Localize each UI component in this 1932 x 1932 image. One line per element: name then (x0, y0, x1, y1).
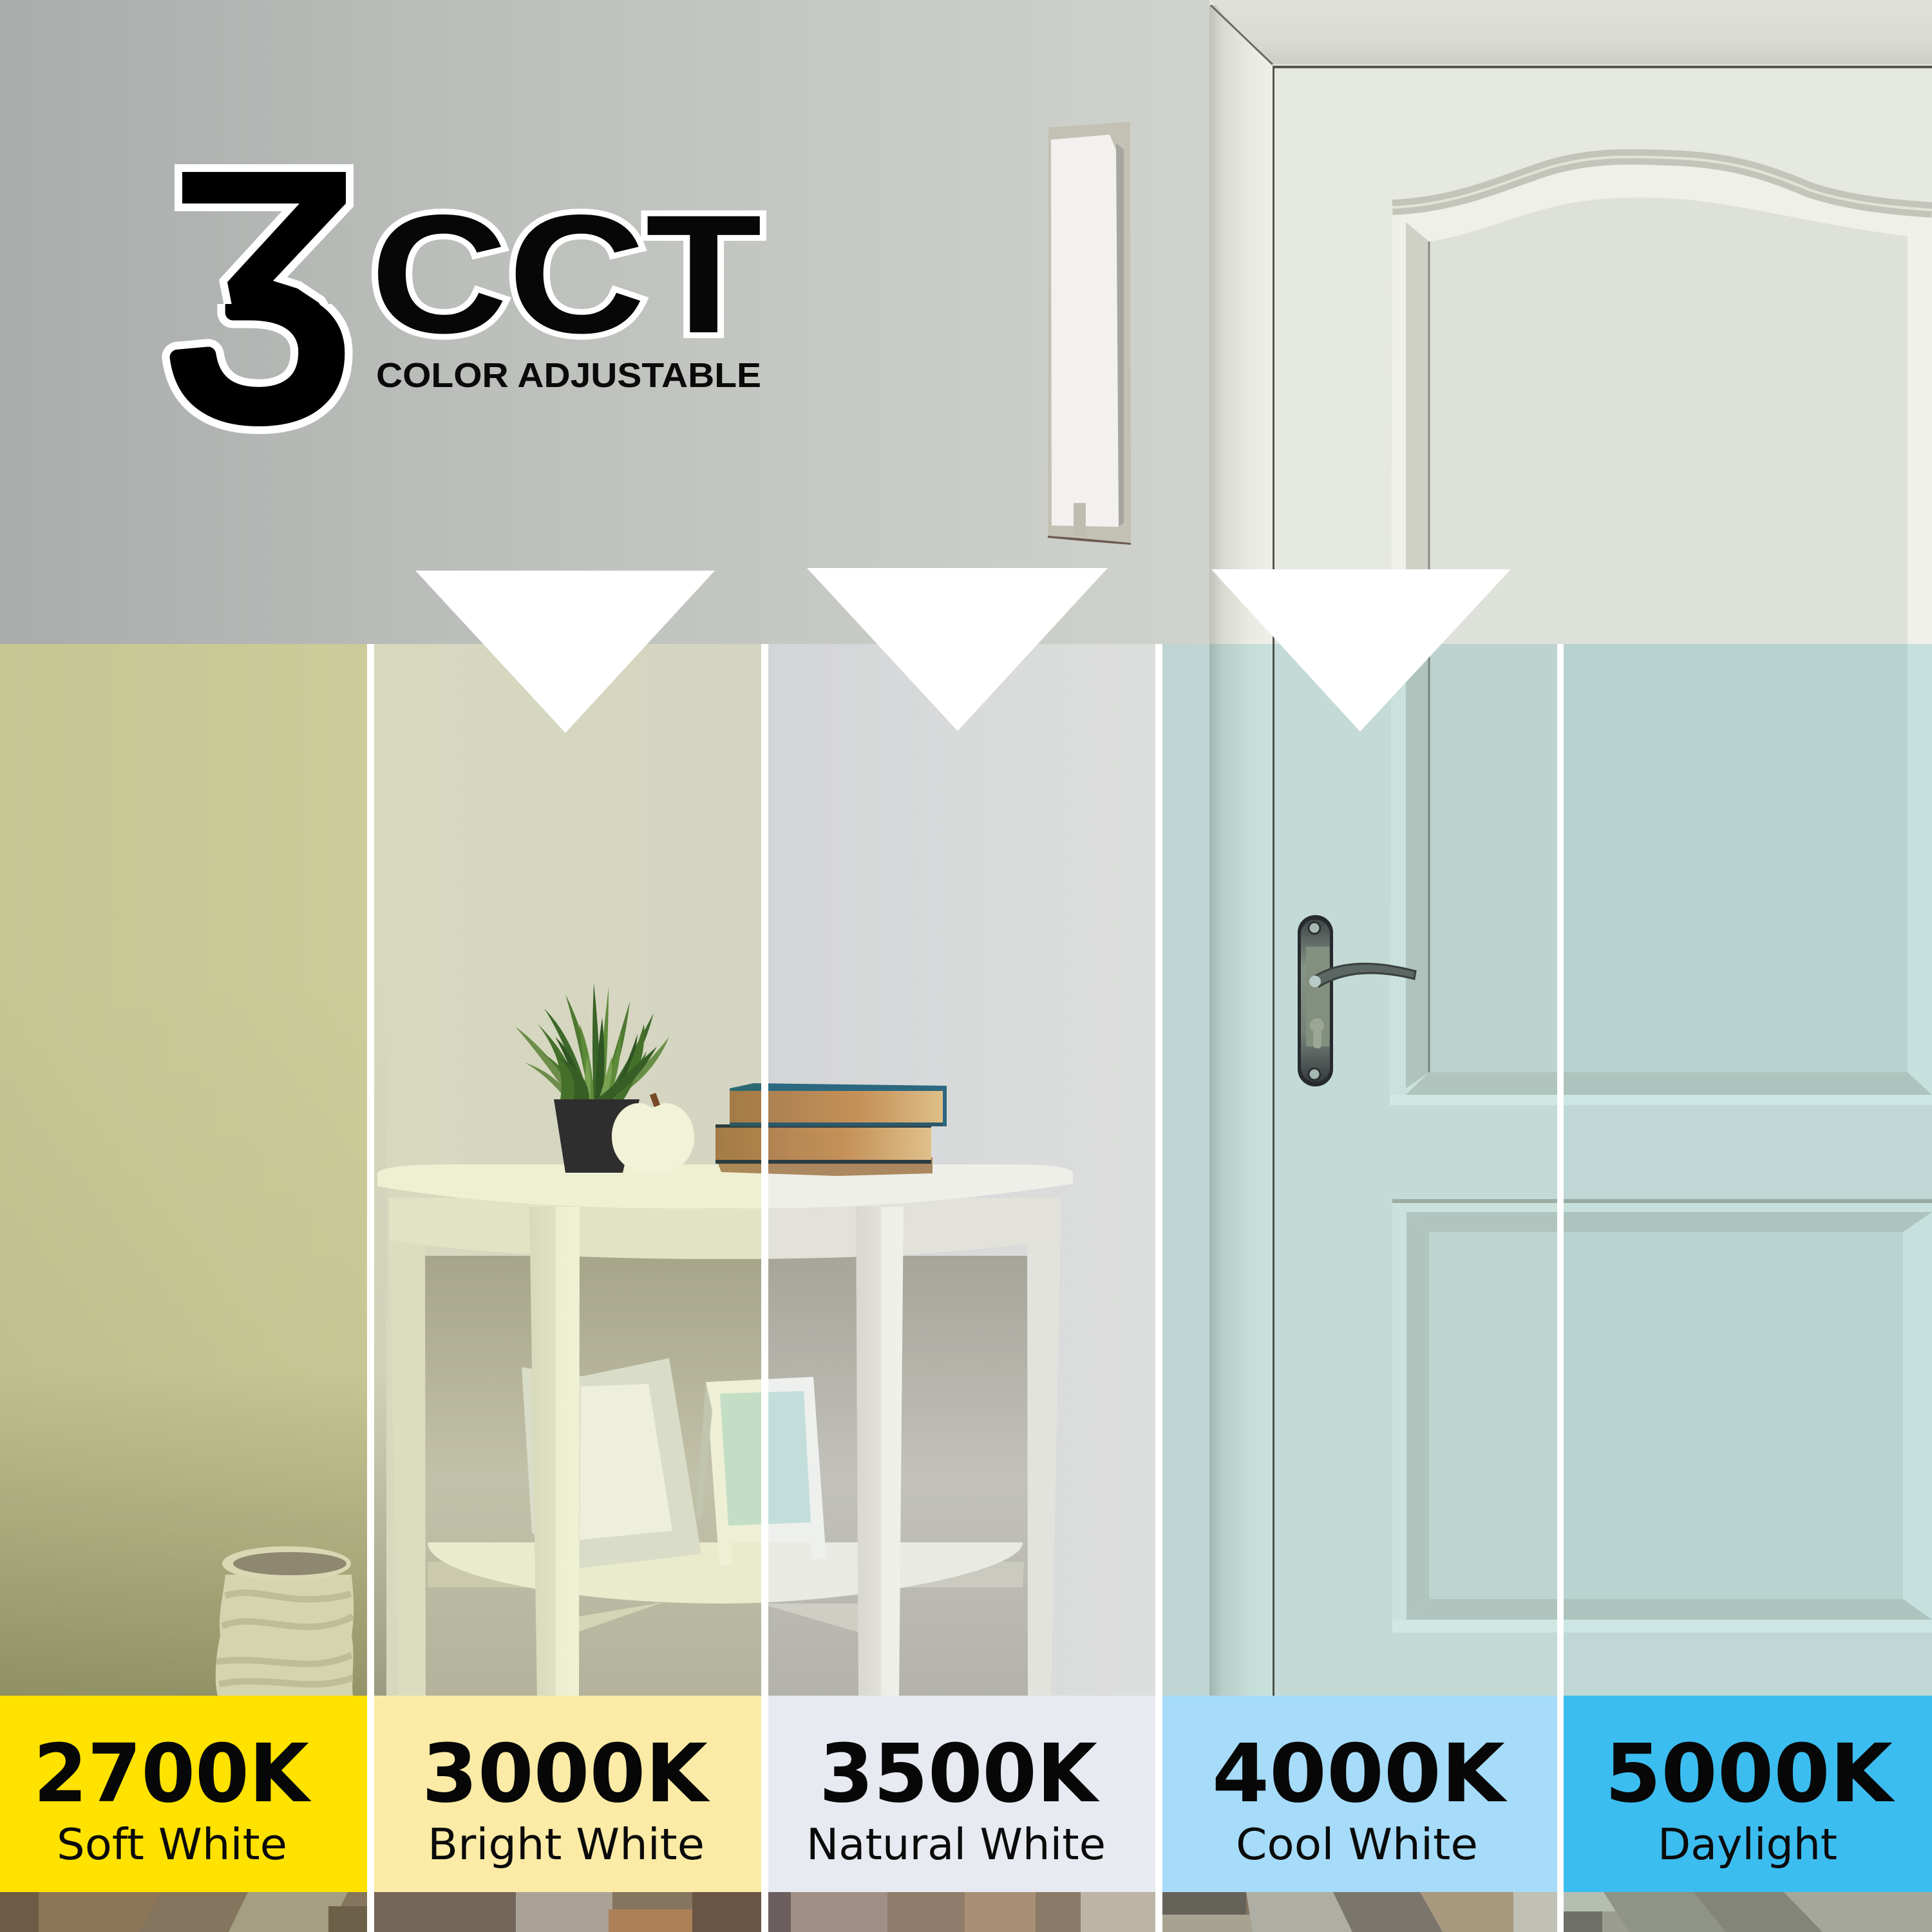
vase (216, 1546, 354, 1696)
subtitle: COLOR ADJUSTABLE (376, 356, 761, 395)
photo: wall lower section (0, 644, 1217, 1700)
door handle (1298, 915, 1416, 1086)
middle book (715, 1124, 931, 1164)
table top (377, 1164, 1073, 1208)
title: 3CCT color adjustable (162, 164, 766, 434)
apron (389, 1198, 1061, 1259)
label: Bright White: Bright White (428, 1819, 705, 1870)
front legs (529, 1207, 904, 1700)
panel: 3500K (768, 1696, 1155, 1892)
sconce notch (1074, 503, 1086, 536)
label: 5000K: 5000K (1605, 1727, 1895, 1821)
label: 3000K: 3000K (422, 1727, 710, 1821)
CCT heading: CCT (370, 180, 762, 368)
back legs (389, 1233, 1061, 1700)
arrow: pointing to 3000K (415, 571, 715, 733)
door lower panel (1392, 1199, 1932, 1633)
photo: shaded area under table (425, 1256, 1030, 1700)
sconce glass (1051, 135, 1119, 527)
leaves (515, 983, 669, 1103)
top book (730, 1083, 947, 1126)
label: 3500K: 3500K (819, 1727, 1100, 1821)
plant (515, 983, 669, 1173)
arrow: pointing to 3500K (807, 568, 1108, 731)
photo: door and frame (1209, 0, 1932, 1700)
numeral 3: 3 (165, 118, 352, 486)
sconce side shadow (1116, 143, 1124, 527)
colour tint overlays for each CCT column (0, 644, 1932, 1696)
numeral 3: 3 (165, 118, 352, 486)
panel: 4000K (1162, 1696, 1557, 1892)
label: Natural White: Natural White (806, 1819, 1106, 1870)
photo: wall upper section (0, 0, 1217, 644)
wall sconce product (1048, 122, 1131, 545)
sconce bottom edge (1048, 536, 1131, 545)
small picture frame (696, 1377, 826, 1565)
white column dividers (367, 644, 1564, 1932)
pot (554, 1099, 639, 1173)
label: Daylight: Daylight (1658, 1819, 1837, 1870)
wood floor (0, 1892, 1932, 1932)
arrow: pointing to 4000K (1211, 569, 1511, 732)
table (377, 1164, 1073, 1700)
label: Cool White: Cool White (1236, 1819, 1478, 1870)
bottom book (715, 1157, 933, 1176)
stack of books (715, 1083, 947, 1176)
label: Soft White: Soft White (57, 1819, 287, 1870)
sconce back plate (1048, 122, 1131, 543)
label: 2700K: 2700K (33, 1727, 312, 1821)
panel: 3000K (374, 1696, 761, 1892)
panel: 5000K (1564, 1696, 1932, 1892)
large picture frame (522, 1358, 701, 1568)
label: 4000K: 4000K (1212, 1727, 1508, 1821)
lower shelf (428, 1542, 1024, 1633)
panel: 2700K (0, 1696, 367, 1892)
door upper panel (1390, 157, 1932, 1105)
ceramic apple (612, 1093, 694, 1173)
